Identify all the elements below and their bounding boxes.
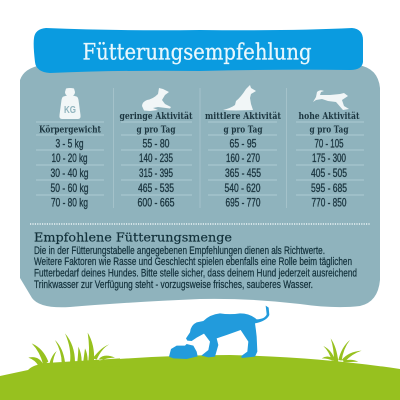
table values: 70 - 105 — [314, 136, 344, 150]
icon: running dog — [313, 90, 349, 110]
table values: 770 - 850 — [312, 196, 347, 210]
table values: 595 - 685 — [311, 181, 347, 195]
table values: 30 - 40 kg — [50, 166, 88, 180]
table values: 465 - 535 — [138, 181, 174, 195]
ground: grass hill — [0, 333, 400, 400]
panel: table background — [20, 65, 380, 307]
dog — [186, 306, 269, 358]
heading: recommended amount: Empfohlene Fütterungsmenge — [34, 230, 232, 244]
table values: 365 - 455 — [225, 166, 261, 180]
table values: 175 - 300 — [312, 151, 346, 165]
table values: 315 - 395 — [139, 166, 173, 180]
table values: 55 - 80 — [142, 136, 170, 150]
title: Fütterungsempfehlung — [82, 40, 312, 66]
column dividers — [114, 88, 286, 208]
table values: 10 - 20 kg — [52, 151, 88, 165]
icon: sitting dog — [223, 85, 256, 110]
icon: weight KG: KG — [64, 105, 76, 116]
icon: lying dog — [142, 88, 171, 111]
table header: activity labels: g pro Tag — [136, 126, 176, 136]
table values: 405 - 505 — [311, 166, 347, 180]
table values: 695 - 770 — [226, 196, 261, 210]
grass tuft right — [322, 338, 362, 362]
body text — [34, 245, 357, 291]
icon: weight KG — [59, 88, 81, 119]
table header: activity labels: geringe Aktivität — [120, 111, 193, 122]
title banner — [34, 28, 363, 73]
table values: 140 - 235 — [139, 151, 173, 165]
table header: activity labels: mittlere Aktivität — [205, 111, 282, 122]
table header: activity labels: g pro Tag — [224, 126, 263, 136]
food bowl — [169, 344, 198, 359]
table values: 70 - 80 kg — [51, 196, 88, 210]
table values: 160 - 270 — [226, 151, 260, 165]
table values: 65 - 95 — [230, 136, 257, 150]
table values: 540 - 620 — [224, 181, 261, 195]
table header: activity labels: hohe Aktivität — [298, 111, 360, 122]
table header: activity labels — [39, 111, 360, 136]
table header: activity labels: g pro Tag — [310, 126, 349, 136]
table header: activity labels: Körpergewicht — [39, 124, 102, 136]
illustration: dog eating from bowl — [169, 306, 269, 359]
grass tuft left — [28, 333, 120, 368]
table values — [50, 136, 347, 210]
table values: 50 - 60 kg — [50, 181, 88, 195]
table values: 600 - 665 — [138, 196, 175, 210]
table row lines — [36, 122, 364, 195]
table values: 3 - 5 kg — [56, 136, 84, 150]
body text: Trinkwasser zur Verfügung steht - vorzugsweise frisches, sauberes Wasser. — [34, 279, 313, 291]
